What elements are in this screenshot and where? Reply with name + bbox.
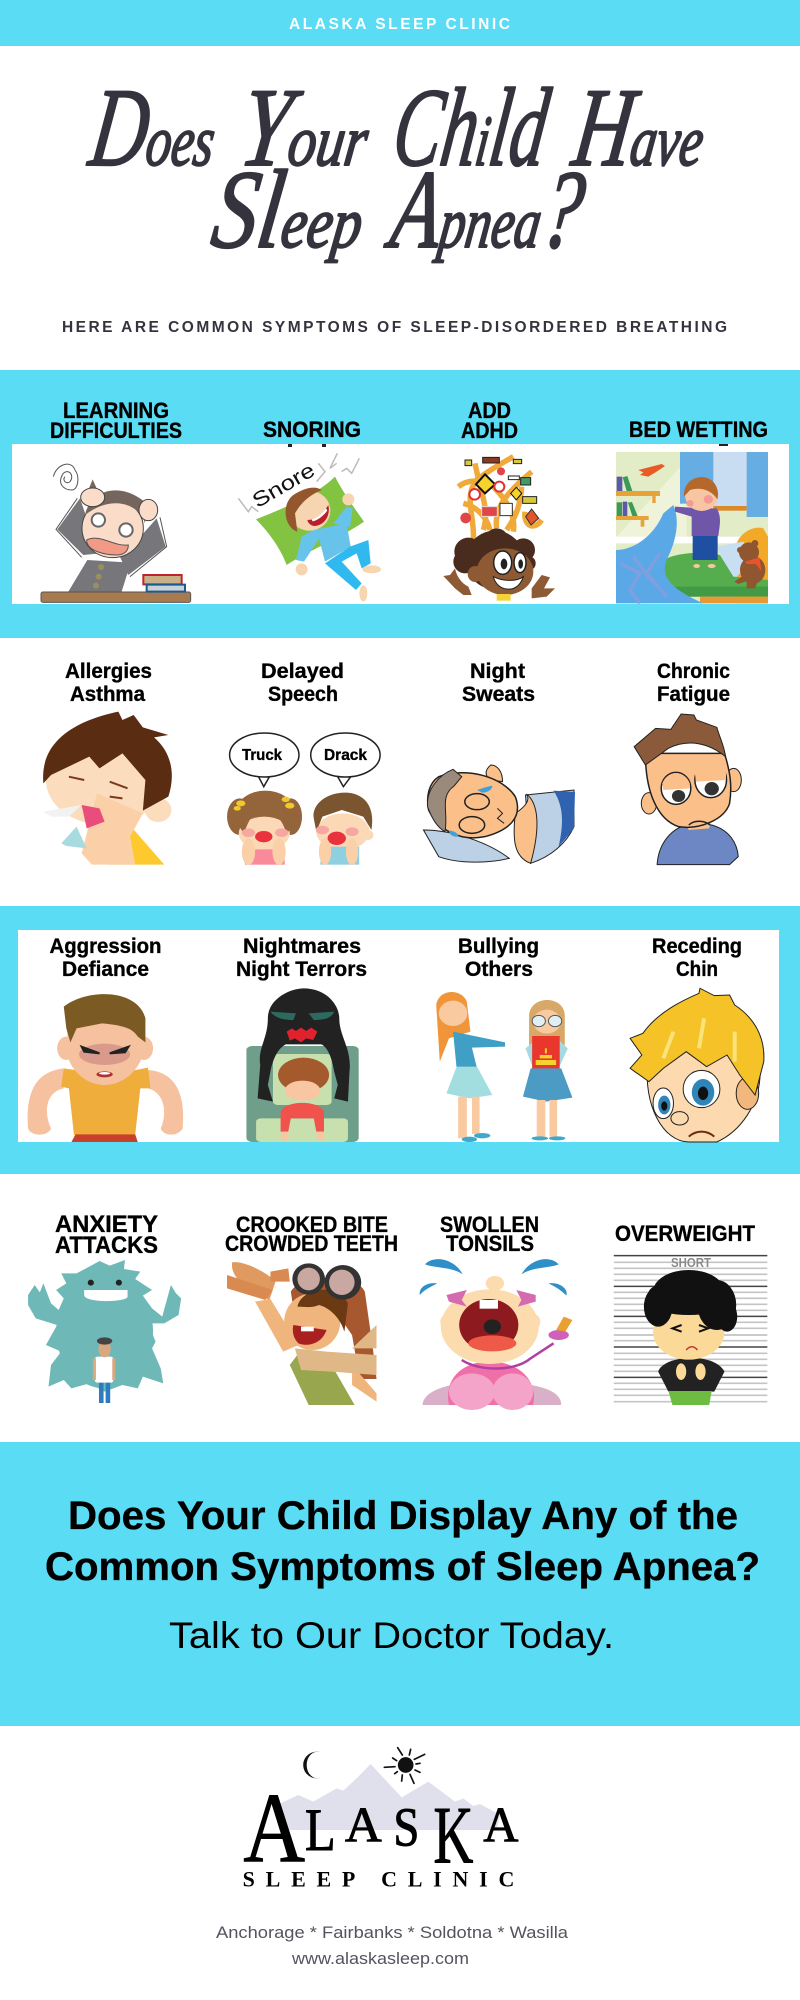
panel: row four symptoms	[28, 1211, 767, 1410]
label: bed wetting: BED WETTING	[629, 417, 768, 442]
icon: crying baby with tonsils	[420, 1259, 572, 1410]
icon: two children with speech bubbles: Truck	[242, 747, 282, 764]
text: talk to our doctor: Talk to Our Doctor Today.	[169, 1615, 614, 1656]
icon: girl and nightmare monster	[246, 988, 359, 1142]
title: Sleep	[206, 148, 373, 272]
label: receding chin: Chin	[676, 958, 718, 981]
icon: boy on wet bed	[616, 452, 768, 603]
label: swollen tonsils: SWOLLEN	[440, 1212, 539, 1237]
label: snoring: SNORING	[263, 417, 361, 442]
label: crooked bite crowded teeth: CROWDED TEETH	[225, 1231, 398, 1256]
label: bullying others: Bullying	[458, 935, 539, 958]
icon: two children with speech bubbles: Drack	[324, 747, 367, 764]
label: crooked bite crowded teeth	[225, 1212, 398, 1256]
logo wordmark: S	[393, 1797, 419, 1858]
label: allergies asthma	[65, 660, 152, 706]
subtitle: HERE ARE COMMON SYMPTOMS OF SLEEP-DISORDERED BREATHING	[62, 319, 727, 336]
label: anxiety attacks: ATTACKS	[55, 1232, 158, 1259]
label: chronic fatigue: Fatigue	[657, 683, 730, 706]
label: crooked bite crowded teeth: CROOKED BITE	[236, 1212, 388, 1237]
logo wordmark: A	[243, 1773, 305, 1884]
icon: sweating sleeping man	[423, 765, 575, 863]
label: receding chin: Receding	[652, 935, 742, 958]
label: add adhd: ADD	[468, 398, 511, 423]
label: delayed speech: Speech	[268, 683, 338, 706]
icon: angry boy	[28, 994, 183, 1142]
label: night sweats: Night	[470, 660, 525, 683]
label: learning difficulties	[50, 398, 182, 443]
icon: two children with speech bubbles	[227, 733, 380, 865]
icon: bullying girls	[436, 992, 572, 1142]
label: allergies asthma: Allergies	[65, 660, 152, 683]
label: allergies asthma: Asthma	[70, 683, 145, 706]
label: receding chin	[652, 935, 742, 981]
label: anxiety attacks	[55, 1211, 158, 1259]
logo wordmark: K	[433, 1790, 473, 1881]
logo wordmark: A	[483, 1797, 518, 1853]
icon: tired boy	[634, 714, 741, 865]
title: Apnea?	[379, 148, 592, 272]
text: clinic locations: Anchorage * Fairbanks * Soldotna * Wasilla	[216, 1923, 569, 1942]
label: bullying others	[458, 935, 539, 981]
label: swollen tonsils	[440, 1212, 539, 1256]
label: aggression defiance: Aggression	[50, 935, 162, 958]
logo mountains	[273, 1764, 500, 1830]
logo moon	[303, 1752, 321, 1778]
label: nightmares night terrors	[236, 935, 367, 981]
call to action panel	[0, 1442, 800, 1726]
icon: boy with receding chin	[630, 988, 764, 1142]
label: learning difficulties: DIFFICULTIES	[50, 418, 182, 443]
icon: girl pilot with toy plane	[227, 1262, 377, 1405]
label: nightmares night terrors: Nightmares	[243, 935, 361, 958]
label: add adhd	[461, 398, 518, 443]
icon: mugshot of overweight boy	[614, 1255, 767, 1405]
icon: snoring boy on pillow: Snore	[248, 459, 319, 513]
logo sun	[384, 1748, 425, 1783]
heading: call to action	[45, 1494, 760, 1589]
label: aggression defiance	[50, 935, 162, 981]
panel: row two symptoms	[43, 660, 741, 865]
heading: call to action: Does Your Child Display Any of the	[68, 1494, 738, 1538]
icon: snoring boy on pillow	[238, 453, 381, 601]
panel: row one symptoms	[0, 370, 800, 638]
icon: stressed boy at desk	[41, 464, 191, 602]
label: overweight: OVERWEIGHT	[615, 1221, 756, 1246]
title: Have	[565, 66, 714, 190]
title	[82, 66, 714, 272]
top banner: ALASKA SLEEP CLINIC	[289, 16, 510, 33]
label: delayed speech: Delayed	[261, 660, 344, 683]
top banner	[0, 0, 800, 46]
title: Child	[387, 66, 556, 190]
label: aggression defiance: Defiance	[62, 958, 149, 981]
label: bullying others: Others	[465, 958, 533, 981]
logo wordmark	[243, 1773, 518, 1892]
label: nightmares night terrors: Night Terrors	[236, 958, 367, 981]
label: delayed speech	[261, 660, 344, 706]
label: night sweats: Sweats	[462, 683, 535, 706]
label: chronic fatigue	[657, 660, 730, 706]
icon: furry anxiety monster and boy	[28, 1260, 181, 1403]
label: swollen tonsils: TONSILS	[446, 1231, 534, 1256]
logo wordmark: A	[345, 1797, 382, 1853]
text: website: www.alaskasleep.com	[291, 1949, 469, 1968]
heading: call to action: Common Symptoms of Sleep Apnea?	[45, 1545, 760, 1589]
label: add adhd: ADHD	[461, 418, 518, 443]
icon: boy with road signs in his head	[443, 457, 555, 601]
title: Does	[82, 66, 225, 190]
title: Your	[234, 66, 379, 190]
label: learning difficulties: LEARNING	[63, 398, 169, 423]
icon: mugshot of overweight boy: SHORT	[671, 1255, 711, 1270]
label: chronic fatigue: Chronic	[657, 660, 730, 683]
logo: alaska sleep clinic	[243, 1748, 518, 1892]
panel: row three symptoms	[0, 906, 800, 1174]
label: anxiety attacks: ANXIETY	[55, 1211, 158, 1238]
label: night sweats	[462, 660, 535, 706]
icon: sneezing boy	[43, 712, 172, 865]
logo wordmark: L	[305, 1797, 336, 1863]
logo wordmark: SLEEP CLINIC	[243, 1867, 514, 1892]
